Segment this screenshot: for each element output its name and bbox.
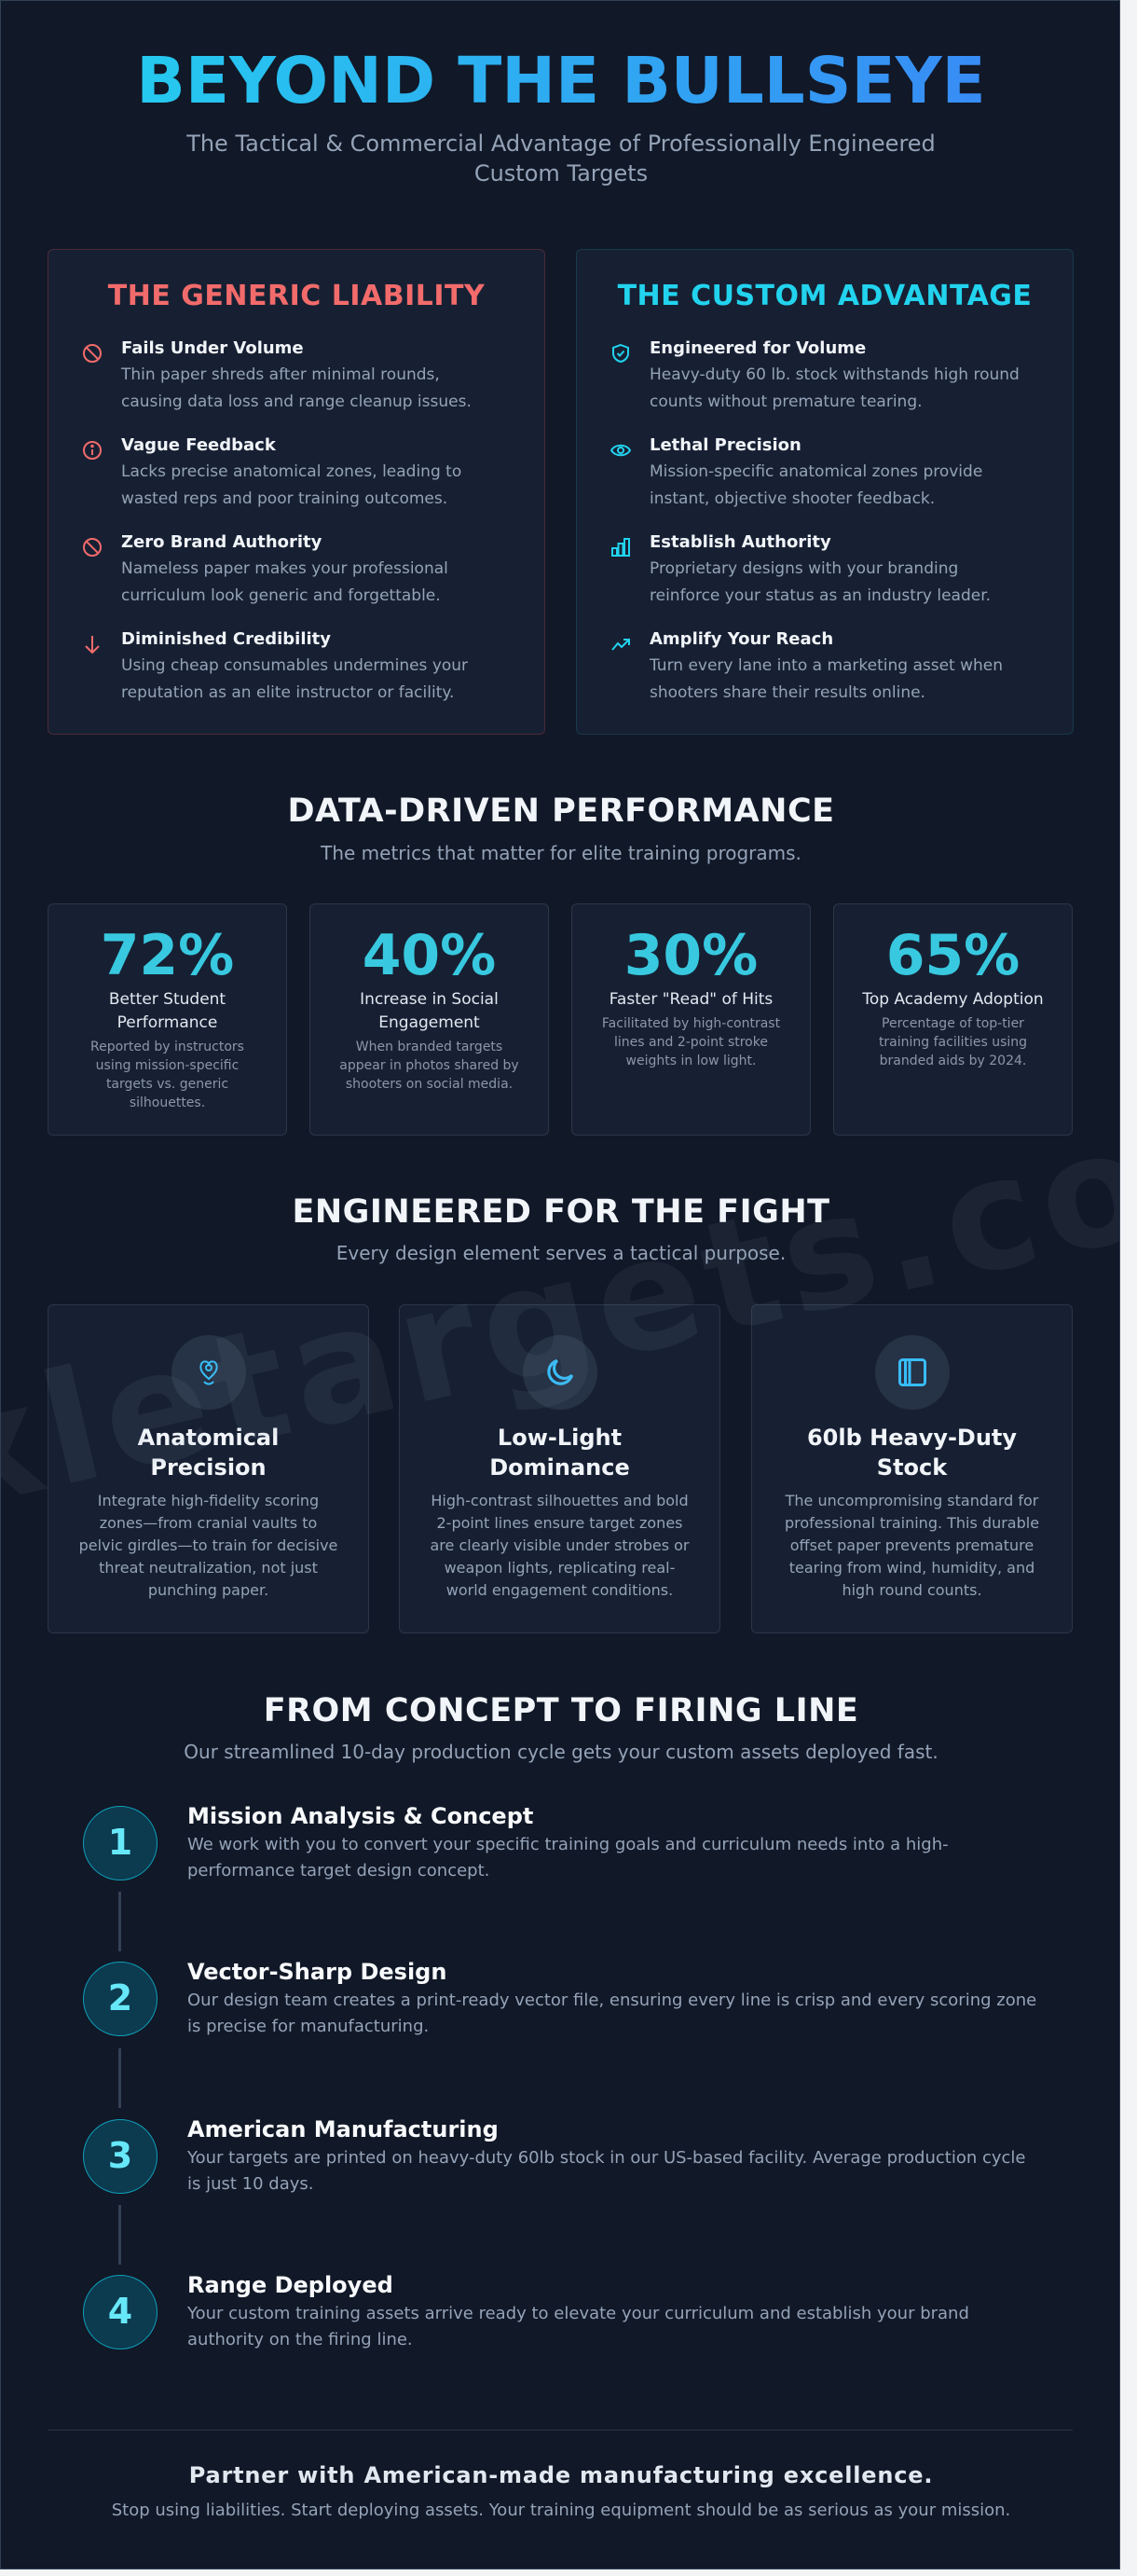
step 4: Your custom training assets arrive ready to elevate your curriculum and establish your brand authority on the firing line. [187,2304,969,2349]
item: engineered for volume [612,338,1020,411]
step 1: We work with you to convert your specific training goals and curriculum needs into a high-performance target design concept. [187,1835,949,1880]
item: establish authority [611,532,991,605]
panel: generic liability: Diminished Credibility [121,629,331,649]
stat card: 65%: 65% [886,923,1020,988]
step 1: Mission Analysis & Concept [187,1803,533,1829]
stat card: 30%: Facilitated by high-contrast lines and 2-point stroke weights in low light. [602,1016,780,1068]
heading: data-driven performance: DATA-DRIVEN PERFORMANCE [287,792,835,830]
stat card: 72% [48,903,287,1136]
subheading: metrics: The metrics that matter for elite training programs. [321,842,801,864]
step 4: Range Deployed [187,2272,393,2298]
feature card: heavy-duty stock [751,1304,1073,1633]
feature card: heavy-duty stock: The uncompromising standard for professional training. This durable offset paper prevents premature tearing from wind, humidity, and high round counts. [785,1492,1039,1599]
stat card: 72%: Reported by instructors using mission-specific targets vs. generic silhouettes. [90,1040,244,1110]
heading: custom advantage: THE CUSTOM ADVANTAGE [618,280,1032,312]
step 3: Your targets are printed on heavy-duty 60lb stock in our US-based facility. Average production cycle is just 10 days. [187,2148,1025,2194]
feature card: anatomical precision: Anatomical Precision [138,1425,279,1481]
feature card: anatomical precision: Integrate high-fidelity scoring zones—from cranial vaults to pelvic girdles—to train for decisive threat neutralization, not just punching paper. [79,1492,337,1599]
panel: custom advantage: Heavy-duty 60 lb. stock withstands high round counts without premature tearing. [650,365,1020,411]
panel: generic liability: Vague Feedback [121,435,276,455]
step 2: 2 [108,1977,132,2018]
heading: concept to firing line: FROM CONCEPT TO FIRING LINE [264,1692,858,1729]
feature card: low-light dominance: Low-Light Dominance [489,1425,630,1481]
stat card: 30%: 30% [624,923,758,988]
item: amplify reach [611,629,1003,702]
heading: generic liability: THE GENERIC LIABILITY [108,280,485,312]
panel: generic liability [48,249,545,735]
item: zero brand authority [83,532,448,605]
feature card: low-light dominance [399,1304,720,1633]
stat card: 40%: When branded targets appear in photos shared by shooters on social media. [339,1040,519,1092]
panel: custom advantage: Proprietary designs with your branding reinforce your status as an industry leader. [650,559,991,605]
stat card: 40%: Increase in Social Engagement [360,990,499,1032]
step 2: Vector-Sharp Design [187,1959,446,1985]
stat card: 30% [571,903,811,1136]
step 1 [83,1803,949,1880]
panel: custom advantage: Establish Authority [650,532,831,552]
item: lethal precision [610,435,982,508]
heading: engineered for the fight: ENGINEERED FOR THE FIGHT [292,1193,830,1231]
panel: generic liability: Nameless paper makes your professional curriculum look generic and forgettable. [121,559,448,605]
panel: custom advantage [576,249,1074,735]
step 4: 4 [108,2291,132,2332]
stat card: 65%: Percentage of top-tier training facilities using branded aids by 2024. [879,1016,1027,1068]
stat card: 72%: 72% [101,923,234,988]
item: diminished credibility [85,629,468,702]
panel: custom advantage: Turn every lane into a marketing asset when shooters share their results online. [650,656,1003,702]
panel: custom advantage: Amplify Your Reach [650,629,833,649]
feature card: low-light dominance: High-contrast silhouettes and bold 2-point lines ensure target zones are clearly visible under strobes or weapon lights, replicating real-world engagement conditions. [430,1492,690,1599]
step 4 [83,2272,969,2349]
stat card: 40% [309,903,549,1136]
subheading: production cycle: Our streamlined 10-day production cycle gets your custom assets deployed fast. [184,1741,938,1763]
panel: custom advantage: Mission-specific anatomical zones provide instant, objective shooter feedback. [650,462,982,508]
stat card: 65%: Top Academy Adoption [862,990,1044,1009]
subtitle: The Tactical & Commercial Advantage of Professionally Engineered Custom Targets [186,131,936,186]
step 3: 3 [108,2135,132,2176]
item: fails under volume [83,338,472,411]
title: BEYOND THE BULLSEYE [136,44,986,118]
stat card: 40%: 40% [363,923,496,988]
item: vague feedback [83,435,461,508]
subheading: tactical purpose: Every design element serves a tactical purpose. [336,1242,786,1264]
step 3: American Manufacturing [187,2116,499,2142]
step 3 [83,2116,1025,2194]
footer text: Stop using liabilities. Start deploying assets. Your training equipment should be as serious as your mission. [112,2500,1010,2520]
stat card: 65% [833,903,1073,1136]
panel: generic liability: Thin paper shreds after minimal rounds, causing data loss and range cleanup issues. [121,365,472,411]
panel: generic liability: Fails Under Volume [121,338,304,358]
panel: generic liability: Using cheap consumables undermines your reputation as an elite instructor or facility. [121,656,468,702]
step 2 [83,1959,1036,2036]
step 1: 1 [108,1822,132,1863]
footer heading: Partner with American-made manufacturing excellence. [189,2462,933,2488]
feature card: anatomical precision [48,1304,369,1633]
stat card: 72%: Better Student Performance [109,990,226,1032]
panel: generic liability: Lacks precise anatomical zones, leading to wasted reps and poor training outcomes. [121,462,461,508]
stat card: 30%: Faster "Read" of Hits [610,990,773,1009]
panel: custom advantage: Lethal Precision [650,435,801,455]
feature card: heavy-duty stock: 60lb Heavy-Duty Stock [807,1425,1017,1481]
step 2: Our design team creates a print-ready vector file, ensuring every line is crisp and every scoring zone is precise for manufacturing. [187,1991,1036,2036]
panel: generic liability: Zero Brand Authority [121,532,322,552]
panel: custom advantage: Engineered for Volume [650,338,866,358]
